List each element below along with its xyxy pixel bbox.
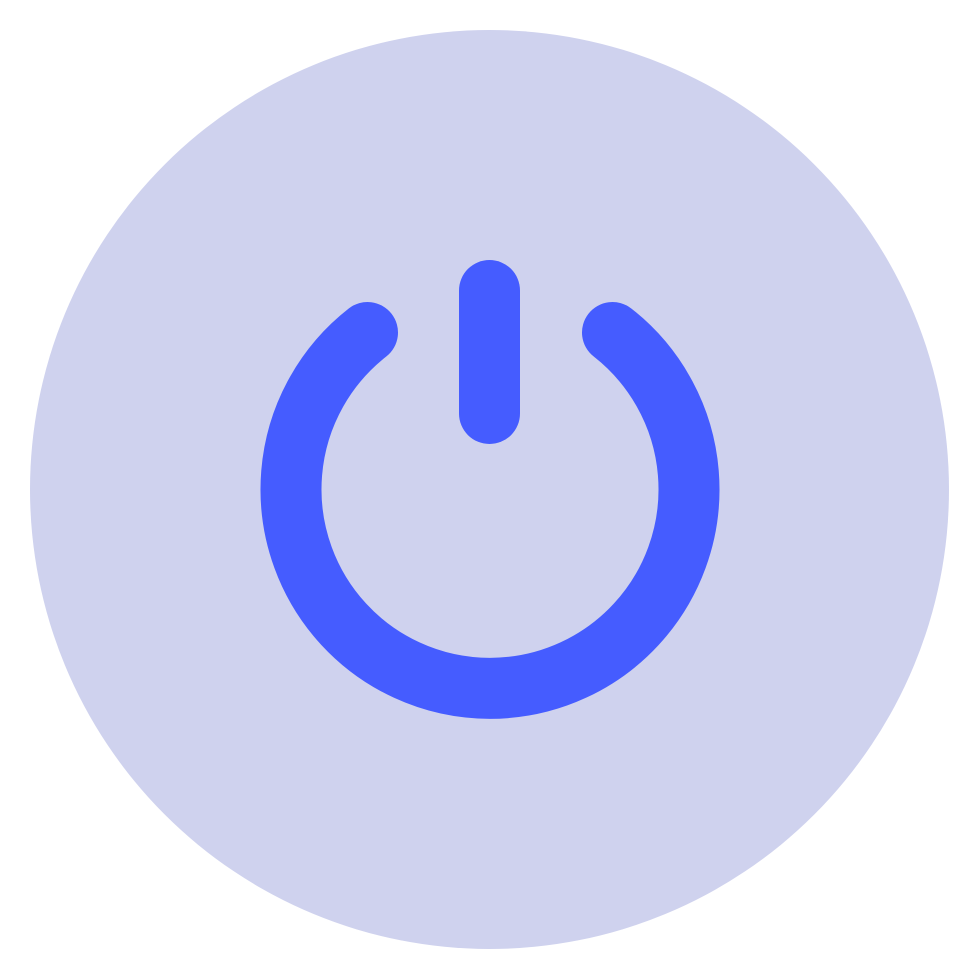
power symbol (291, 290, 689, 688)
power ring (291, 332, 689, 688)
power bar (459, 290, 520, 414)
